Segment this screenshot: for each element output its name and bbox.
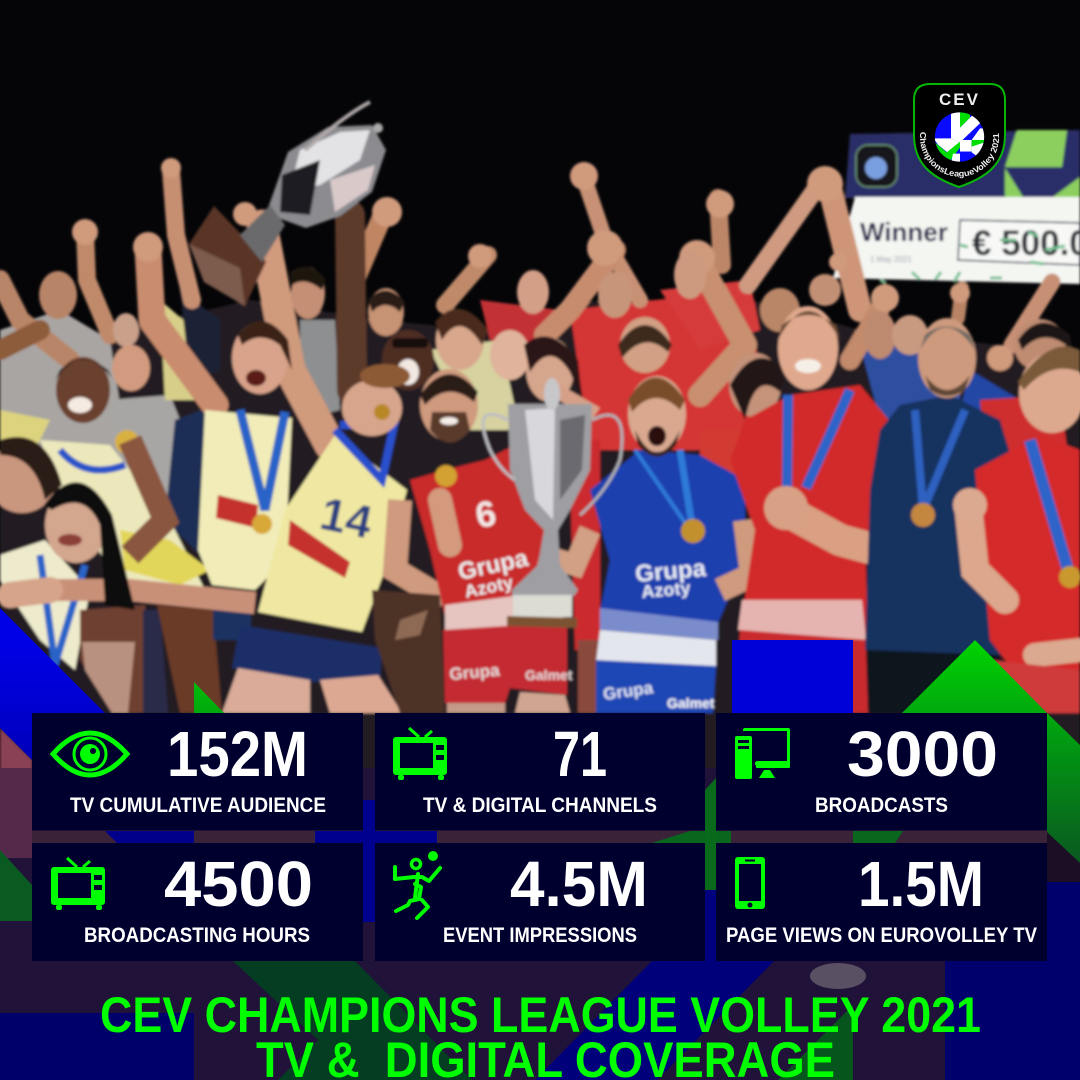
prize cheque bbox=[833, 130, 1080, 284]
back row staff and team bbox=[0, 280, 1070, 713]
navy coach bbox=[865, 318, 1018, 713]
panel: TV and digital channels bbox=[375, 713, 705, 830]
panel: TV cumulative audience: TV CUMULATIVE AUDIENCE bbox=[70, 794, 326, 817]
stat panels bbox=[32, 713, 1047, 961]
red team big man bbox=[730, 306, 908, 713]
panel: page views: 1.5M bbox=[858, 848, 984, 920]
red team man number six: Grupa bbox=[456, 545, 531, 586]
geometric colour shapes bbox=[0, 608, 1080, 1080]
CEV Champions League Volley logo: CEV bbox=[939, 90, 980, 109]
red team man number six: 6 bbox=[472, 492, 499, 536]
lower purple floor bbox=[0, 768, 1080, 1080]
red team man right bbox=[953, 346, 1080, 713]
panel: event impressions: EVENT IMPRESSIONS bbox=[443, 924, 637, 947]
logo ball bbox=[934, 112, 984, 162]
icon: volleyball player bbox=[395, 851, 440, 918]
panel: page views: PAGE VIEWS ON EUROVOLLEY TV bbox=[726, 924, 1037, 947]
red team man number six: Azoty bbox=[463, 572, 515, 602]
icon: television bbox=[393, 728, 447, 780]
team blue jersey man: Grupa bbox=[634, 555, 708, 588]
fists bbox=[72, 158, 1013, 371]
panel: TV and digital channels: TV & DIGITAL CHANNELS bbox=[423, 794, 657, 817]
back row faces bbox=[39, 251, 1072, 420]
raised silver cup bbox=[189, 102, 386, 306]
crowd backing bbox=[0, 300, 1080, 770]
panel: broadcasting hours: 4500 bbox=[164, 848, 313, 920]
icon: eye bbox=[53, 733, 127, 775]
CEV Champions League Volley logo: ChampionsLeagueVolley 2021 bbox=[920, 132, 1000, 178]
team celebration photo bbox=[0, 102, 1080, 770]
icon: television bbox=[51, 858, 105, 910]
panel: broadcasts: BROADCASTS bbox=[815, 794, 948, 817]
panel: broadcasting hours bbox=[32, 843, 363, 961]
yellow team front bbox=[0, 410, 445, 713]
prize cheque: Winner bbox=[860, 217, 948, 247]
panel: page views bbox=[716, 843, 1047, 961]
raised arms bbox=[0, 170, 1052, 445]
CEV Champions League Volley logo bbox=[913, 83, 1006, 188]
title: CEV CHAMPIONS LEAGUE VOLLEY 2021 bbox=[100, 987, 981, 1043]
prize cheque: 1 May 2021 bbox=[870, 255, 912, 264]
red team man number six: Galmet bbox=[525, 667, 573, 683]
team blue jersey man: Galmet bbox=[667, 695, 715, 711]
silver trophy centre bbox=[483, 378, 622, 628]
yellow team faces bbox=[0, 321, 410, 610]
floor edge bbox=[0, 728, 32, 770]
panel: event impressions bbox=[375, 843, 705, 961]
panel: TV and digital channels: 71 bbox=[553, 718, 607, 790]
yellow team front: 14 bbox=[316, 487, 377, 549]
title bbox=[100, 987, 981, 1080]
red team man number six: Grupa bbox=[449, 661, 501, 684]
panel: broadcasting hours: BROADCASTING HOURS bbox=[84, 924, 310, 947]
panel: event impressions: 4.5M bbox=[510, 848, 648, 920]
panel: TV cumulative audience bbox=[32, 713, 363, 830]
red team man number six bbox=[410, 369, 590, 713]
icon: desktop computer bbox=[735, 728, 790, 779]
team blue jersey man bbox=[540, 376, 752, 713]
icon: smartphone bbox=[735, 857, 765, 909]
panel: broadcasts bbox=[716, 713, 1047, 830]
panel: broadcasts: 3000 bbox=[847, 718, 998, 790]
team blue jersey man: Grupa bbox=[602, 678, 655, 704]
team blue jersey man: Azoty bbox=[641, 578, 691, 602]
panel: TV cumulative audience: 152M bbox=[167, 718, 308, 790]
